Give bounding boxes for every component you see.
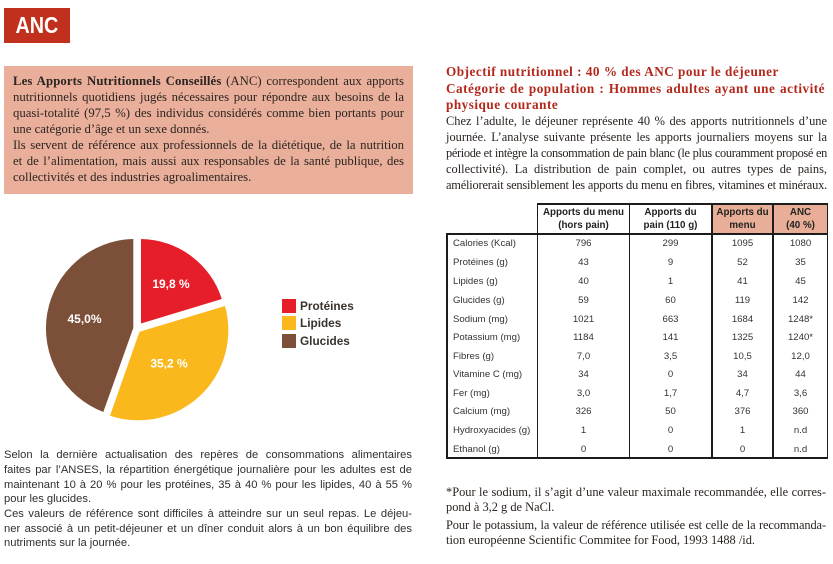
table: apports nutritionnels: (hors pain) xyxy=(558,220,609,230)
table: apports nutritionnels: Fibres (g) xyxy=(453,351,494,362)
text block: repères ANSES: Ces valeurs de référence sont difficiles à atteindre sur un seul repas. Le déjeu- xyxy=(4,508,412,520)
text block: notes de bas de tableau: *Pour le sodium, il s’agit d’une valeur maximale recommandée, elle corres- xyxy=(446,485,826,499)
slice: protéines 19,8 % xyxy=(141,239,222,324)
table: apports nutritionnels: Lipides (g) xyxy=(453,276,498,287)
table: apports nutritionnels: Apports du xyxy=(644,207,697,218)
text block: introduction: collectivité). La distribution de pain complet, ou autres types de pains, xyxy=(446,162,827,176)
table: apports nutritionnels: 1 xyxy=(668,276,673,287)
text block: repères ANSES: ner associé à un petit-déjeuner et un dîner conduit alors à un bon équilibre des xyxy=(4,523,412,535)
table: apports nutritionnels: Potassium (mg) xyxy=(453,332,520,343)
table: apports nutritionnels: 59 xyxy=(578,295,589,306)
title: ANC badge: ANC xyxy=(16,12,58,38)
table: apports nutritionnels: 142 xyxy=(792,295,808,306)
table: apports nutritionnels: 663 xyxy=(662,314,678,325)
table: apports nutritionnels: Glucides (g) xyxy=(453,295,505,306)
heading: objectif nutritionnel: physique courante xyxy=(446,97,558,112)
table: apports nutritionnels: 45 xyxy=(795,276,806,287)
table: apports nutritionnels: Calcium (mg) xyxy=(453,406,510,417)
heading: objectif nutritionnel: Objectif nutritionnel : 40 % des ANC pour le déjeuner xyxy=(446,64,779,79)
table: apports nutritionnels: 44 xyxy=(795,369,806,380)
table: apports nutritionnels: 0 xyxy=(740,444,745,455)
table: apports nutritionnels: 1021 xyxy=(573,314,594,325)
table: apports nutritionnels: 1325 xyxy=(732,332,753,343)
table: apports nutritionnels: 50 xyxy=(665,406,676,417)
table: apports nutritionnels: 376 xyxy=(734,406,750,417)
table: apports nutritionnels: 34 xyxy=(737,369,748,380)
table: apports nutritionnels: menu xyxy=(729,220,756,230)
table: apports nutritionnels: n.d xyxy=(794,425,807,436)
text block: introduction: journée. L’analyse suivante présente les apports journaliers moyens sur la xyxy=(446,130,827,144)
panel: définition des ANC: quasi-totalité (97,5 %) des individus considérés comme bien portants pour xyxy=(13,106,404,120)
table: apports nutritionnels: 1095 xyxy=(732,238,753,249)
legend: Lipides xyxy=(300,316,341,330)
text block: repères ANSES: Selon la dernière actualisation des repères de consommations alimentaires xyxy=(4,449,412,461)
pie chart: répartition énergétique xyxy=(46,239,228,420)
table: apports nutritionnels: 1248* xyxy=(788,314,813,325)
table: apports nutritionnels: (40 %) xyxy=(786,220,815,230)
table: apports nutritionnels: 12,0 xyxy=(791,351,810,362)
text block: repères ANSES xyxy=(4,449,412,549)
panel: définition des ANC: nutritionnels quotidiens jugés nécessaires pour répondre aux besoins de la xyxy=(13,90,404,104)
table: apports nutritionnels: 40 xyxy=(578,276,589,287)
heading: objectif nutritionnel xyxy=(446,64,825,112)
table: apports nutritionnels: 1 xyxy=(740,425,745,436)
table: apports nutritionnels: 299 xyxy=(662,238,678,249)
table: apports nutritionnels: n.d xyxy=(794,444,807,455)
heading: objectif nutritionnel: Catégorie de population : Hommes adultes ayant une activité xyxy=(446,81,825,96)
table: apports nutritionnels: Apports du menu xyxy=(543,207,624,218)
table: apports nutritionnels: Fer (mg) xyxy=(453,388,490,399)
table: apports nutritionnels: Calories (Kcal) xyxy=(453,238,516,249)
table: apports nutritionnels: 3,5 xyxy=(664,351,677,362)
table: apports nutritionnels xyxy=(446,203,828,459)
slice: glucides 45,0 %: 45,0% xyxy=(67,312,102,326)
table: apports nutritionnels: Hydroxyacides (g) xyxy=(453,425,530,436)
table: apports nutritionnels: 52 xyxy=(737,257,748,268)
table: apports nutritionnels: 796 xyxy=(575,238,592,249)
legend xyxy=(282,299,354,348)
table: apports nutritionnels: 34 xyxy=(578,369,589,380)
slice: glucides 45,0 % xyxy=(46,239,133,412)
table: apports nutritionnels: 1184 xyxy=(573,332,594,343)
panel: définition des ANC xyxy=(4,66,413,194)
panel: définition des ANC: collectivités et des industries agroalimentaires. xyxy=(13,170,251,184)
table: apports nutritionnels: 0 xyxy=(668,369,673,380)
text block: introduction xyxy=(446,114,828,192)
table: apports nutritionnels: 119 xyxy=(735,295,750,306)
table: apports nutritionnels: Sodium (mg) xyxy=(453,314,508,325)
table: apports nutritionnels: 1684 xyxy=(732,314,753,325)
table: apports nutritionnels: 0 xyxy=(668,444,673,455)
panel: définition des ANC: et de l’alimentation, mais aussi aux responsables de la santé publique, des xyxy=(13,154,404,168)
table: apports nutritionnels: 1080 xyxy=(790,238,811,249)
table: apports nutritionnels: ANC xyxy=(790,207,811,218)
slice: protéines 19,8 %: 19,8 % xyxy=(152,277,190,291)
table: apports nutritionnels: 0 xyxy=(581,444,586,455)
table: apports nutritionnels: 360 xyxy=(792,406,808,417)
text block: repères ANSES: maintenant 10 à 20 % pour les protéines, 35 à 40 % pour les lipides, 40 à 55 % xyxy=(4,479,412,491)
panel: définition des ANC: une catégorie d’âge et un sexe donnés. xyxy=(13,122,209,136)
table: apports nutritionnels: 1,7 xyxy=(664,388,677,399)
text block: repères ANSES: faites par l’ANSES, la répartition énergétique journalière pour les adultes est de xyxy=(4,464,412,476)
text block: notes de bas de tableau: tion européenne Scientific Commitee for Food, 1993 1488 /id. xyxy=(446,533,755,547)
table: apports nutritionnels: Ethanol (g) xyxy=(453,444,500,455)
legend: Glucides xyxy=(300,334,350,348)
table header highlight xyxy=(712,204,827,234)
table: apports nutritionnels: 60 xyxy=(665,295,676,306)
legend: Protéines xyxy=(300,299,354,313)
text block: introduction: Chez l’adulte, le déjeuner représente 40 % des apports nutritionnels d’une xyxy=(446,114,827,128)
table: apports nutritionnels: 4,7 xyxy=(736,388,749,399)
panel: définition des ANC: Les Apports Nutritionnels Conseillés (ANC) correspondent aux apports xyxy=(13,74,404,88)
text block: repères ANSES: pour les glucides. xyxy=(4,493,91,505)
table: apports nutritionnels: 3,6 xyxy=(794,388,807,399)
table: apports nutritionnels: Protéines (g) xyxy=(453,257,508,268)
table: apports nutritionnels: 9 xyxy=(668,257,673,268)
table: apports nutritionnels: 7,0 xyxy=(577,351,590,362)
table: apports nutritionnels: 326 xyxy=(575,406,592,417)
table: apports nutritionnels: Vitamine C (mg) xyxy=(453,369,522,380)
text block: introduction: améliorerait sensiblement les apports du menu en fibres, vitamines et minéraux. xyxy=(446,178,827,192)
table: apports nutritionnels: 3,0 xyxy=(577,388,590,399)
title: ANC badge xyxy=(4,8,70,43)
table: apports nutritionnels: 35 xyxy=(795,257,806,268)
slice: lipides 35,2 % xyxy=(110,306,228,420)
text block: notes de bas de tableau: Pour le potassium, la valeur de référence utilisée est celle de la recommanda- xyxy=(446,518,826,532)
table: apports nutritionnels: 43 xyxy=(578,257,589,268)
table: apports nutritionnels: 0 xyxy=(668,425,673,436)
table: apports nutritionnels: 1240* xyxy=(788,332,813,343)
text block: repères ANSES: nutriments sur la journée. xyxy=(4,537,130,549)
table: apports nutritionnels: 141 xyxy=(662,332,678,343)
text block: introduction: période et intègre la consommation de pain blanc (le plus couramment proposé en xyxy=(446,146,827,160)
slice: lipides 35,2 %: 35,2 % xyxy=(150,356,188,370)
table: apports nutritionnels: 10,5 xyxy=(733,351,752,362)
table: apports nutritionnels: 1 xyxy=(581,425,586,436)
text block: notes de bas de tableau: pond à 3,2 g de NaCl. xyxy=(446,500,554,514)
table: apports nutritionnels: pain (110 g) xyxy=(644,220,697,230)
panel: définition des ANC: Ils servent de référence aux professionnels de la diététique, de la nutrition xyxy=(13,138,404,152)
table: apports nutritionnels: Apports du xyxy=(716,207,769,218)
text block: notes de bas de tableau xyxy=(446,485,826,547)
table: apports nutritionnels: 41 xyxy=(737,276,748,287)
